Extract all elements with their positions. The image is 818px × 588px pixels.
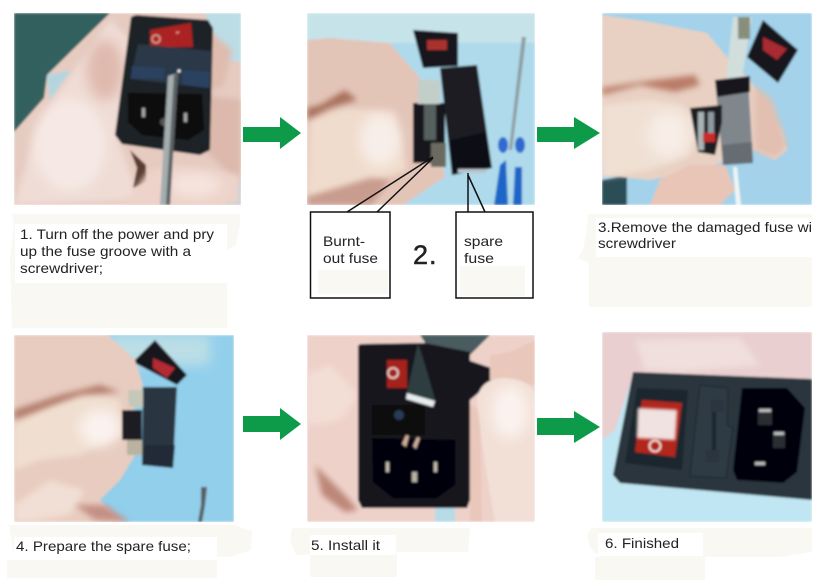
arrow: step 1 to 2 <box>243 117 301 149</box>
photo: removing the damaged fuse <box>602 13 812 205</box>
caption text: 3.Remove the damaged fuse wi <box>598 219 812 235</box>
panel: step 1: screwdriver; <box>20 260 103 276</box>
caption text: 5. Install it <box>311 537 380 553</box>
callout: spare fuse: spare <box>464 233 503 249</box>
caption backing <box>578 214 812 307</box>
panel: step 2 <box>307 13 535 298</box>
caption backing <box>10 214 240 328</box>
photo: finished assembly <box>602 332 812 522</box>
photo: preparing the spare fuse <box>14 335 234 522</box>
caption text <box>598 222 811 248</box>
callout: burnt-out fuse <box>310 157 433 298</box>
arrow: step 5 to 6 <box>537 411 600 443</box>
photo: burnt-out and spare fuse <box>307 13 535 205</box>
caption text: 4. Prepare the spare fuse; <box>16 538 191 554</box>
panel: step 6 <box>587 332 812 580</box>
panel: step 5 <box>290 335 535 577</box>
callout: burnt-out fuse: out fuse <box>323 250 378 266</box>
callout: burnt-out fuse: Burnt- <box>323 233 365 249</box>
caption backing <box>7 525 252 578</box>
callout: spare fuse: fuse <box>464 250 494 266</box>
callout: spare fuse <box>456 173 533 298</box>
photo: installing the fuse <box>307 335 535 522</box>
step number 2: 2. <box>413 240 438 270</box>
panel: step 3 <box>578 13 812 307</box>
panel: step 4 <box>7 335 252 578</box>
caption text: 1. Turn off the power and pry <box>20 226 214 242</box>
arrow: step 2 to 3 <box>537 117 600 149</box>
caption backing <box>587 528 812 580</box>
panel: step 1: up the fuse groove with a <box>20 243 191 259</box>
arrow: step 4 to 5 <box>243 408 301 440</box>
caption text: screwdriver <box>598 235 676 251</box>
caption backing <box>290 528 470 577</box>
panel: step 1 <box>10 13 241 328</box>
caption text: 6. Finished <box>605 535 679 551</box>
photo: prying the fuse groove <box>14 13 241 205</box>
